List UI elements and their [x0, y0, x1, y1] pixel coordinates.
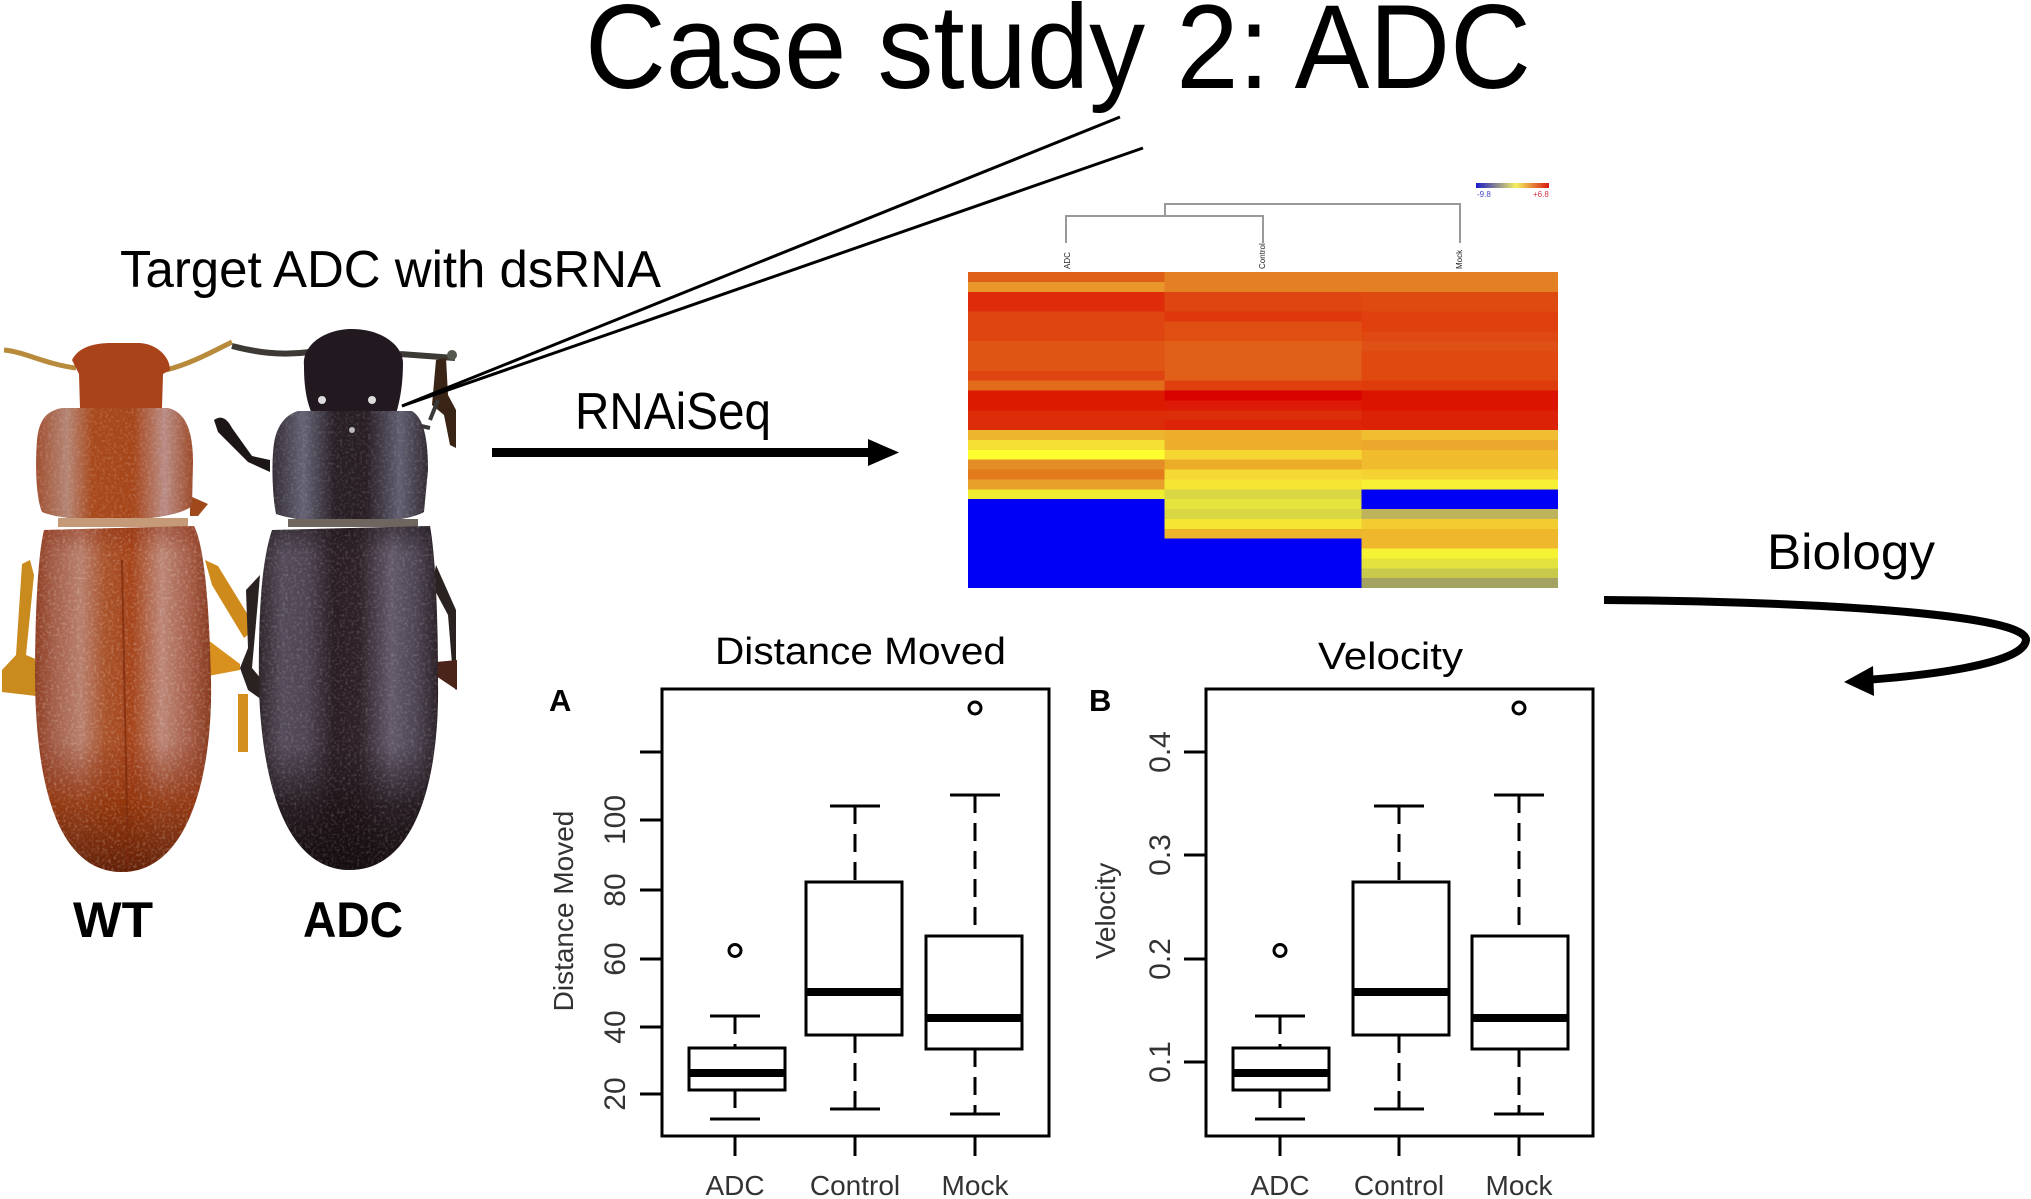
heatmap column labels: Control	[1258, 243, 1267, 269]
heatmap	[968, 272, 1558, 588]
color scale legend	[1476, 183, 1549, 199]
box plot B: Velocity: 0.1	[1144, 1041, 1177, 1083]
icon: ADC beetle	[214, 329, 457, 870]
heatmap column labels	[1063, 243, 1464, 269]
heatmap column labels: Mock	[1455, 249, 1464, 269]
label: RNAiSeq: RNAiSeq	[575, 383, 771, 441]
box plot B: Velocity: 0.4	[1144, 731, 1177, 773]
panel letter A: A	[549, 683, 571, 718]
heading: Velocity: Velocity	[1318, 636, 1463, 678]
color scale legend: -9.8	[1477, 190, 1491, 199]
box plot A: Distance Moved: 80	[599, 873, 632, 907]
icon: WT beetle	[2, 342, 256, 872]
box plot A: Distance Moved: 60	[599, 942, 632, 976]
panel letter B: B	[1089, 683, 1111, 718]
color scale legend: +6.8	[1533, 190, 1549, 199]
box plot A: Distance Moved	[548, 689, 1049, 1199]
arrow: injection needle lines	[402, 117, 1143, 406]
heading: Distance Moved: Distance Moved	[715, 631, 1006, 673]
box plot A: Distance Moved: Distance Moved	[548, 811, 579, 1011]
label: WT: WT	[73, 892, 153, 948]
box plot A: Distance Moved: 40	[599, 1010, 632, 1044]
arrow: Biology curved	[1604, 600, 2026, 696]
label: Biology: Biology	[1767, 524, 1935, 580]
box plot B: Velocity: Velocity	[1090, 863, 1121, 959]
arrow: RNAiSeq	[492, 439, 899, 466]
label: target ADC with dsRNA: Target ADC with dsRNA	[120, 241, 661, 299]
box plot B: Velocity: 0.2	[1144, 938, 1177, 980]
label: ADC: ADC	[303, 892, 403, 948]
box plot A: Distance Moved: 20	[599, 1077, 632, 1111]
heatmap dendrogram	[1066, 204, 1460, 243]
box plot B: Velocity: 0.3	[1144, 834, 1177, 876]
box plot A: Distance Moved: 100	[599, 795, 632, 845]
box plot B: Velocity	[1090, 689, 1593, 1199]
heatmap column labels: ADC	[1063, 252, 1072, 269]
